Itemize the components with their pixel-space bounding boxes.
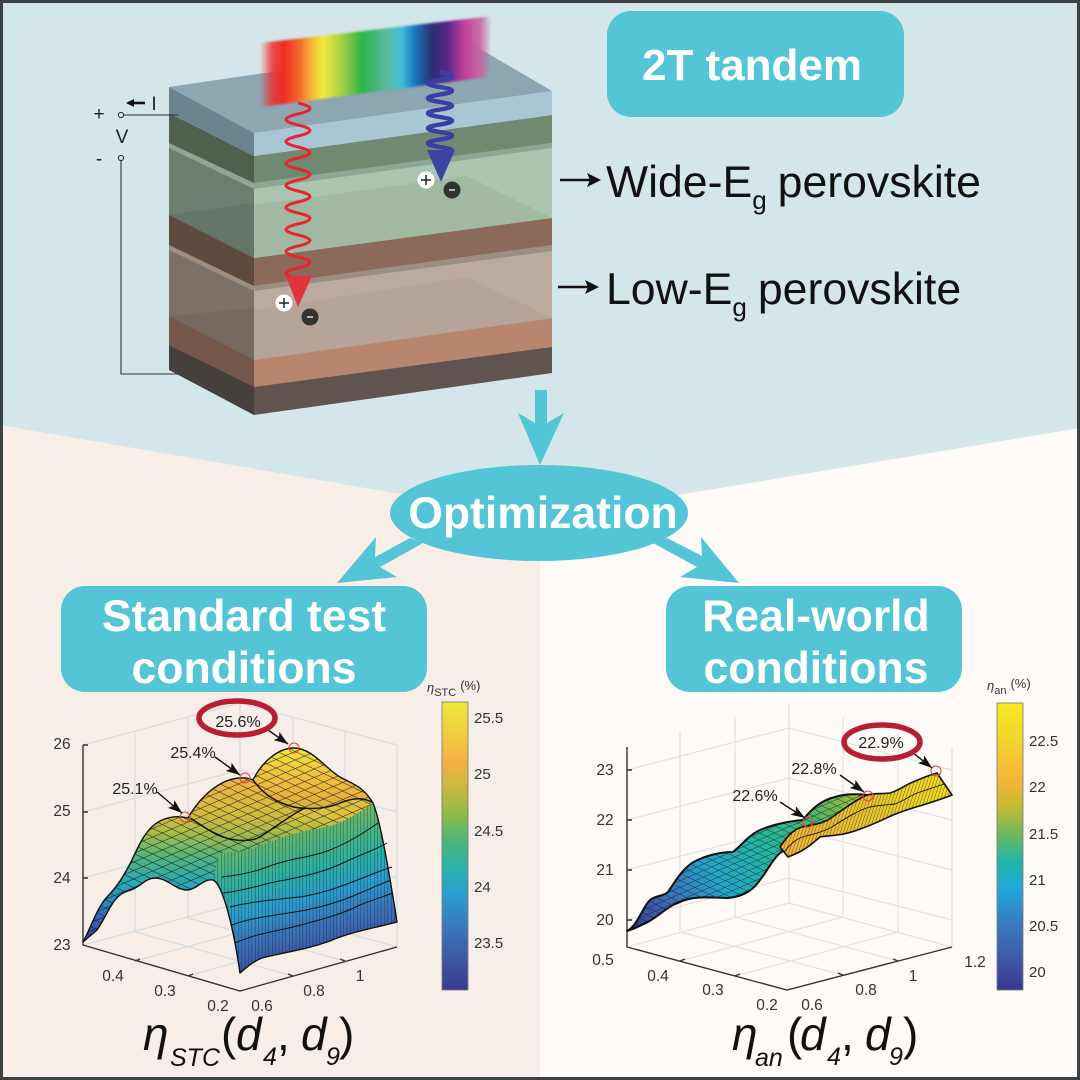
heading: real-world conditions: Real-world <box>702 592 930 641</box>
callout: 22.9% highlighted: 22.9% <box>858 735 904 752</box>
heading: 2T tandem <box>607 11 904 117</box>
heading: optimization ellipse <box>390 465 688 561</box>
label: wide-Eg perovskite: perovskite <box>778 158 981 207</box>
callout: 22.8%: 22.8% <box>791 761 837 778</box>
callout: 25.6% highlighted <box>199 701 288 744</box>
surface <box>83 748 397 973</box>
circuit: terminals and wires <box>93 94 179 374</box>
label: low-Eg perovskite <box>558 265 961 322</box>
equation: eta an: ) <box>903 1008 918 1060</box>
label: low-Eg perovskite: Low-E <box>606 265 732 314</box>
axes <box>83 745 397 991</box>
equation: eta STC: STC <box>170 1044 221 1072</box>
axis labels: 1 <box>356 968 364 985</box>
layer: glass top electrode <box>169 43 552 156</box>
axis labels <box>53 736 364 1015</box>
layer: green transport layer <box>169 113 552 183</box>
layer: bottom electrode <box>169 345 552 415</box>
equation: eta an: d <box>865 1008 892 1060</box>
colorbar: annual: 21 <box>1029 872 1046 889</box>
solar spectrum band <box>260 16 492 107</box>
axis labels: 23 <box>596 762 614 779</box>
colorbar: annual: an <box>994 685 1006 697</box>
colorbar: annual: η <box>987 678 994 693</box>
axis labels: 0.4 <box>647 968 669 985</box>
axis labels: 0.3 <box>702 982 724 999</box>
colorbar: annual: 21.5 <box>1029 826 1058 843</box>
colorbar: STC: 24.5 <box>474 823 503 840</box>
colorbar: STC <box>427 678 503 990</box>
label: low-Eg perovskite: g <box>732 292 747 322</box>
colorbar: STC: 24 <box>474 879 491 896</box>
layer: low-Eg perovskite <box>169 245 552 360</box>
callout: 22.9% highlighted <box>844 725 932 768</box>
charge carriers: wide-Eg <box>418 172 460 198</box>
background: lower right panel <box>540 400 1080 1080</box>
colorbar: STC: STC <box>434 687 456 699</box>
colorbar: annual: 20 <box>1029 964 1046 981</box>
equation: eta an: , <box>841 1008 854 1060</box>
layer: wide-Eg perovskite <box>169 143 552 258</box>
axis labels: 24 <box>53 870 71 887</box>
equation: eta STC: , <box>277 1008 290 1060</box>
colorbar: annual <box>987 676 1058 990</box>
background: upper teal panel <box>0 0 1080 518</box>
axis labels: 21 <box>596 862 614 879</box>
axis labels: 0.8 <box>303 983 325 1000</box>
colorbar: annual: 22.5 <box>1029 733 1058 750</box>
heading: real-world conditions <box>666 586 962 693</box>
axis labels: 23 <box>53 937 71 954</box>
colorbar: annual: 22 <box>1029 779 1046 796</box>
circuit: terminals and wires: I <box>151 94 157 115</box>
callout: 25.1%: 25.1% <box>112 781 158 798</box>
label: wide-Eg perovskite: Wide-E <box>606 158 752 207</box>
equation: eta STC: 4 <box>263 1043 277 1071</box>
axis labels: 0.4 <box>102 968 124 985</box>
colorbar: STC: 25 <box>474 766 491 783</box>
axis labels <box>592 762 986 1014</box>
heading: optimization ellipse: Optimization <box>408 489 678 538</box>
equation: eta an: d <box>800 1008 827 1060</box>
axis labels: 0.6 <box>801 997 823 1014</box>
equation: eta an: an <box>755 1044 783 1072</box>
equation: eta STC: 9 <box>326 1043 340 1071</box>
equation: eta an: ( <box>787 1008 803 1060</box>
layer: copper transport layer <box>169 315 552 387</box>
arrow: down to optimization <box>518 390 564 465</box>
red photon wave <box>286 103 312 307</box>
equation: eta STC: ( <box>221 1008 237 1060</box>
colorbar: STC: η <box>427 680 434 695</box>
colorbar: STC: 25.5 <box>474 710 503 727</box>
chart: annual 3D surface <box>592 703 986 1014</box>
label: wide-Eg perovskite: g <box>752 185 767 215</box>
equation: eta STC: η <box>143 1008 169 1060</box>
callout: 25.4%: 25.4% <box>170 745 216 762</box>
axis labels: 20 <box>596 912 614 929</box>
circuit: terminals and wires: + <box>93 104 105 125</box>
callout: 25.6% highlighted: 25.6% <box>215 714 261 731</box>
colorbar: STC: (%) <box>460 678 480 693</box>
callout: 22.6%: 22.6% <box>732 788 778 805</box>
arrow: to real-world conditions <box>653 537 739 583</box>
peak markers <box>803 766 941 827</box>
axis labels: 0.6 <box>251 998 273 1015</box>
callout: 25.1% <box>112 781 182 813</box>
circuit: terminals and wires: - <box>96 149 102 170</box>
colorbar: annual: (%) <box>1010 676 1031 691</box>
label: wide-Eg perovskite <box>560 158 981 215</box>
axis labels: 25 <box>53 803 71 820</box>
surface <box>627 773 952 931</box>
heading: standard test conditions <box>61 586 427 693</box>
circuit: terminals and wires: V <box>116 127 129 148</box>
callout: 22.6% <box>732 788 805 818</box>
heading: standard test conditions: conditions <box>132 644 356 693</box>
axis labels: 1 <box>909 968 917 985</box>
axis labels: 22 <box>596 812 614 829</box>
background: lower left panel <box>0 400 540 1080</box>
callout: 22.8% <box>791 761 864 792</box>
equation: eta an: 4 <box>827 1043 841 1071</box>
layer: brown interlayer <box>169 212 552 286</box>
equation: eta STC: ) <box>339 1008 354 1060</box>
colorbar: annual: 20.5 <box>1029 918 1058 935</box>
diagram: tandem cell layer stack <box>169 43 552 415</box>
equation: eta an: 9 <box>889 1043 903 1071</box>
charge carriers: low-Eg <box>276 294 318 326</box>
axis labels: 0.5 <box>592 952 614 969</box>
axis labels: 0.2 <box>756 997 778 1014</box>
axes <box>627 747 952 990</box>
axis labels: 1.2 <box>964 954 986 971</box>
chart: STC 3D surface <box>53 701 397 1015</box>
axis labels: 0.8 <box>855 982 877 999</box>
arrow: to standard test conditions <box>337 537 423 583</box>
axis labels: 26 <box>53 736 71 753</box>
equation: eta an: η <box>732 1008 758 1060</box>
heading: 2T tandem: 2T tandem <box>642 41 862 90</box>
equation: eta STC: d <box>301 1008 328 1060</box>
axis labels: 0.3 <box>154 983 176 1000</box>
label: low-Eg perovskite: perovskite <box>758 265 961 314</box>
axis labels: 0.2 <box>207 998 229 1015</box>
heading: real-world conditions: conditions <box>704 644 928 693</box>
heading: standard test conditions: Standard test <box>102 592 386 641</box>
colorbar: STC: 23.5 <box>474 935 503 952</box>
blue photon wave <box>427 72 455 182</box>
peak markers <box>180 743 299 822</box>
equation: eta STC: d <box>236 1008 263 1060</box>
callout: 25.4% <box>170 745 240 775</box>
